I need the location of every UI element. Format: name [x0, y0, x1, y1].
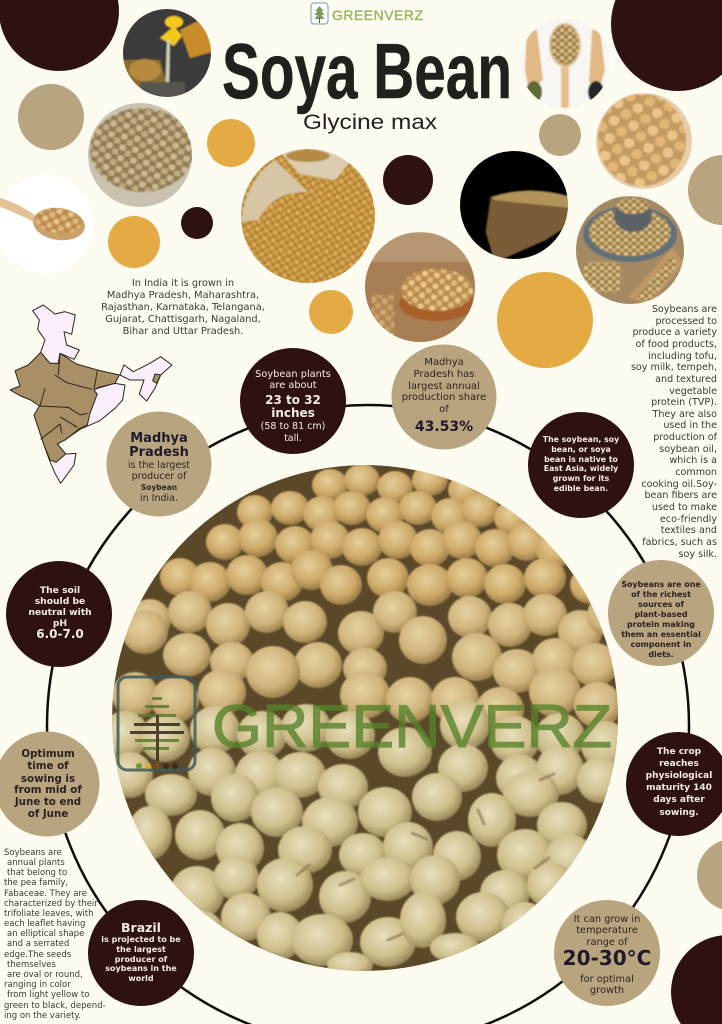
callout: sowing time: sowing is: [21, 773, 75, 785]
text: soybean food products: Soybeans are: [652, 304, 717, 315]
callout: sowing time: from mid of: [14, 784, 82, 796]
text: soybean food products: processed to: [655, 316, 717, 327]
callout: sowing time: of June: [28, 808, 68, 820]
callout: native to East Asia: East Asia, widely: [544, 464, 618, 473]
text: soybean plant description: that belong to: [7, 868, 67, 878]
callout: sowing time: June to end: [14, 796, 81, 808]
callout: crop maturity: The crop: [657, 747, 702, 757]
callout: Madhya Pradesh largest producer: Soybean: [141, 483, 177, 492]
callout: plant-based protein: Soybeans are one: [621, 580, 701, 589]
text: soybean food products: bean fibers are: [644, 490, 717, 501]
callout: soil pH: The soil: [40, 585, 80, 596]
callout: temperature range: 20-30°C: [563, 946, 651, 970]
callout: native to East Asia: bean, or soya: [551, 445, 611, 454]
callout: soil pH: 6.0-7.0: [36, 627, 84, 641]
callout: plant-based protein: component in: [631, 640, 691, 649]
decorative circle: dark top right: [611, 0, 722, 91]
text: where soybean is grown in India: In India it is grown in: [132, 278, 234, 289]
text: soybean food products: common: [675, 467, 717, 478]
decorative circle: tan right edge: [688, 155, 722, 225]
callout: soil pH: neutral with: [28, 607, 92, 618]
text: soybean plant description: characterized by their: [4, 899, 98, 909]
callout: native to East Asia: edible bean.: [554, 484, 608, 493]
callout: Madhya Pradesh largest producer: Madhya: [130, 431, 188, 446]
callout: Madhya Pradesh production share: Pradesh has: [414, 369, 474, 380]
callout: Madhya Pradesh largest producer: producer of: [132, 471, 187, 482]
callout: Madhya Pradesh production share: Madhya: [424, 357, 464, 368]
callout: plant height: Soybean plants: [255, 369, 331, 380]
text: soybean plant description: from light yellow to: [7, 990, 89, 1000]
callout: plant-based protein: plant-based: [634, 610, 688, 619]
callout: plant height: [240, 348, 346, 454]
callout: Madhya Pradesh largest producer: Pradesh: [129, 445, 189, 460]
callout: crop maturity: reaches: [659, 759, 699, 769]
text: soybean food products: which is a: [669, 455, 717, 466]
photo: soybean close-up: [596, 93, 692, 189]
text: soybean food products: and textured: [655, 374, 717, 385]
callout: Madhya Pradesh production share: of: [439, 404, 449, 415]
callout: plant-based protein: [608, 560, 714, 666]
photo: oil pouring: [123, 9, 211, 97]
decorative circle: large yellow: [497, 272, 593, 368]
callout: native to East Asia: [528, 412, 634, 518]
callout: crop maturity: sowing.: [659, 808, 699, 818]
text: soybean food products: used in the: [663, 420, 717, 431]
text: soybean food products: vegetable: [669, 386, 717, 397]
decorative circle: dark bottom right: [671, 935, 722, 1024]
photo: heap of soybeans: [86, 102, 194, 210]
main photo: soybeans close-up: [101, 464, 629, 978]
text: soybean plant description: themselves: [7, 960, 57, 970]
decorative circle: dark top left: [0, 0, 119, 71]
text: soybean plant description: an elliptical shape: [7, 929, 84, 939]
callout: sowing time: Optimum: [21, 748, 75, 760]
callout: crop maturity: maturity 140: [646, 783, 712, 793]
decorative circle: yellow lower left: [108, 216, 160, 268]
text: soybean plant description: are oval or round,: [7, 970, 83, 980]
text: soybean plant description: Soybeans are: [4, 848, 62, 858]
callout: native to East Asia: The soybean, soy: [543, 435, 619, 444]
callout: soil pH: pH: [53, 618, 67, 629]
text: soybean plant description: ranging in color: [4, 980, 71, 990]
callout: plant-based protein: them an essential: [621, 630, 701, 639]
photo: bowl of soybeans on wood: [364, 232, 476, 344]
callout: temperature range: [554, 900, 660, 1006]
text: soybean plant description: [4, 848, 106, 1021]
callout: plant height: (58 to 81 cm): [261, 421, 325, 432]
callout: temperature range: for optimal: [580, 974, 634, 985]
callout: soil pH: should be: [35, 596, 85, 607]
circular connector ring: [47, 405, 689, 1024]
callout: Brazil: soybeans in the: [105, 964, 177, 973]
text: soybean food products: soy silk.: [678, 549, 717, 560]
callout: Madhya Pradesh production share: largest annual: [408, 381, 480, 392]
callout: sowing time: [0, 732, 100, 836]
callout: temperature range: range of: [586, 937, 628, 948]
callout: Madhya Pradesh production share: [392, 344, 496, 450]
callout: Madhya Pradesh largest producer: is the largest: [128, 460, 190, 471]
callout: Brazil: is projected to be: [101, 935, 181, 944]
text: soybean food products: soybean oil,: [659, 444, 717, 455]
watermark: large Greenverz logo: [118, 677, 612, 770]
callout: temperature range: growth: [590, 985, 624, 996]
text: soybean food products: production of: [653, 432, 718, 443]
watermark: large Greenverz logo: GREENVERZ: [212, 693, 612, 760]
text: soybean plant description: edge.The seeds: [4, 950, 72, 960]
text: soybean food products: of food products,: [636, 339, 717, 350]
callout: crop maturity: physiological: [646, 771, 712, 781]
callout: Madhya Pradesh production share: production share: [402, 392, 486, 403]
logo: top: [311, 3, 423, 24]
logo: top: GREENVERZ: [332, 7, 423, 23]
callout: Brazil: Brazil: [121, 920, 161, 935]
text: where soybean is grown in India: Gujarat, Chattisgarh, Nagaland,: [105, 314, 261, 325]
callout: Madhya Pradesh largest producer: [106, 412, 212, 516]
text: where soybean is grown in India: Madhya Pradesh, Maharashtra,: [107, 290, 259, 301]
callout: plant-based protein: diets.: [648, 650, 674, 659]
callout: Brazil: [88, 900, 194, 1006]
text: soybean food products: [631, 304, 718, 560]
map of India: [10, 305, 172, 483]
callout: temperature range: temperature: [576, 925, 638, 936]
callout: Brazil: the largest: [116, 945, 166, 954]
callout: plant-based protein: protein making: [627, 620, 695, 629]
decorative circle: dark small: [181, 207, 213, 239]
decorative circle: tan lower right: [697, 839, 722, 911]
text: soybean food products: textiles and: [661, 525, 717, 536]
photo: bean spoon on white: [0, 175, 94, 273]
text: soybean plant description: annual plants: [7, 858, 65, 868]
text: soybean plant description: each leaflet having: [4, 919, 85, 929]
callout: plant-based protein: sources of: [638, 600, 685, 609]
text: soybean food products: including tofu,: [648, 351, 717, 362]
decorative circle: yellow centre: [309, 290, 353, 334]
callout: soil pH: [6, 561, 112, 667]
text: where soybean is grown in India: Bihar and Uttar Pradesh.: [123, 326, 243, 337]
callout: plant height: tall.: [284, 433, 302, 444]
photo: mortar with beans: [575, 196, 685, 306]
callout: Madhya Pradesh production share: 43.53%: [415, 419, 473, 435]
photo: burlap sacks of beans: [240, 148, 376, 286]
text: soybean plant description: Fabaceae. They are: [4, 889, 87, 899]
text: soybean food products: produce a variety: [632, 327, 717, 338]
photo: three spoons: [524, 22, 606, 108]
text: soybean plant description: and a serrated: [7, 939, 69, 949]
callout: native to East Asia: grown for its: [553, 474, 610, 483]
text: soybean plant description: trifoliate leaves, with: [4, 909, 94, 919]
decorative circle: yellow upper: [207, 119, 255, 167]
callout: Madhya Pradesh largest producer: in India.: [140, 493, 178, 504]
text: soybean food products: used to make: [652, 502, 717, 513]
decorative circle: tan left: [18, 84, 84, 150]
callout: plant height: 23 to 32: [265, 393, 321, 407]
text: soybean plant description: the pea family,: [4, 878, 68, 888]
text: soybean plant description: green to black, depend-: [4, 1001, 106, 1011]
title: Soya Bean: [222, 27, 512, 115]
text: soybean food products: soy milk, tempeh,: [631, 362, 717, 373]
callout: Brazil: world: [128, 974, 154, 983]
text: soybean plant description: ing on the variety.: [4, 1011, 81, 1021]
text: soybean food products: fabrics, such as: [642, 537, 717, 548]
callout: temperature range: It can grow in: [574, 914, 640, 925]
callout: sowing time: time of: [27, 760, 69, 772]
photo: burlap sack on black: [459, 150, 570, 262]
bean seams: [297, 774, 554, 940]
callout: native to East Asia: bean is native to: [544, 455, 619, 464]
callout: plant height: inches: [271, 406, 315, 420]
text: where soybean is grown in India: [101, 278, 265, 337]
subtitle: Glycine max: [303, 111, 438, 134]
callout: crop maturity: [626, 732, 722, 836]
text: where soybean is grown in India: Rajasthan, Karnataka, Telangana,: [101, 302, 265, 313]
callout: plant height: are about: [269, 380, 317, 391]
callout: plant-based protein: of the richest: [631, 590, 691, 599]
decorative circle: dark centre: [383, 155, 433, 205]
decorative circle: tan upper right: [539, 114, 581, 156]
text: soybean food products: eco-friendly: [660, 514, 717, 525]
text: soybean food products: They are also: [651, 409, 717, 420]
text: soybean food products: cooking oil.Soy-: [641, 479, 717, 490]
text: soybean food products: protein (TVP).: [651, 397, 717, 408]
callout: crop maturity: days after: [653, 795, 705, 805]
callout: Brazil: producer of: [115, 955, 168, 964]
